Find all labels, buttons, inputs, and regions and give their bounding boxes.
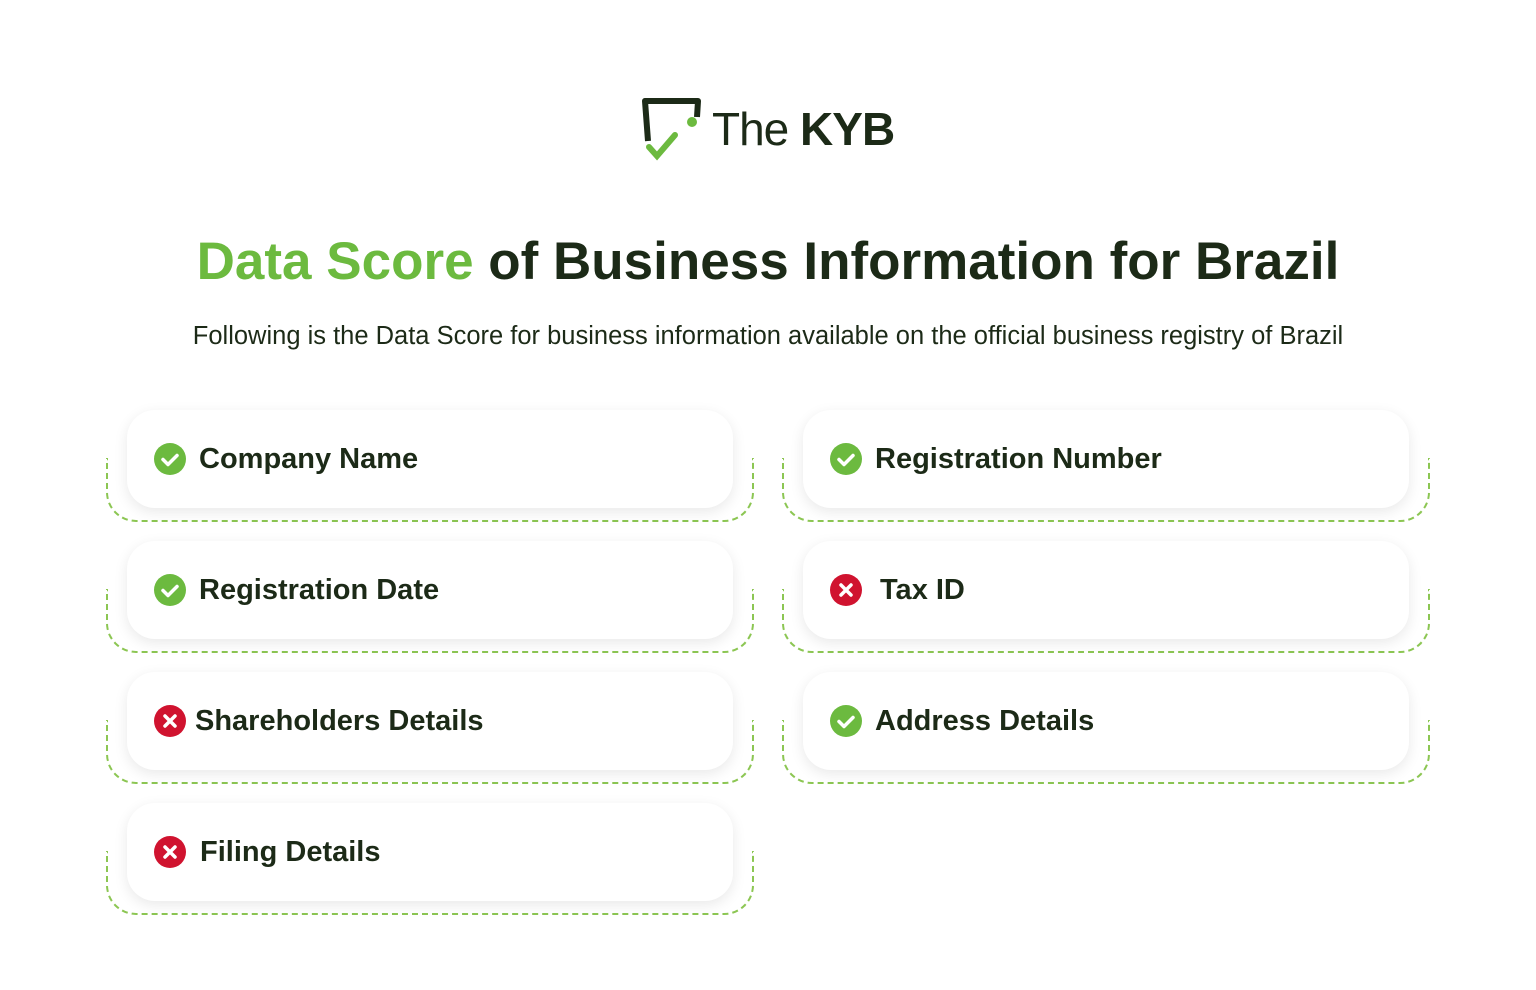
card: Registration Date bbox=[127, 541, 733, 639]
card: Registration Number: Registration Number bbox=[875, 442, 1162, 474]
card: Address Details bbox=[803, 672, 1409, 770]
card: Shareholders Details bbox=[127, 672, 733, 770]
card: Tax ID bbox=[803, 541, 1409, 639]
title: Data Score of Business Information for Brazil bbox=[197, 232, 1339, 291]
text: logo wordmark: The KYB bbox=[712, 103, 894, 155]
card: Registration Date: Registration Date bbox=[199, 574, 439, 606]
card: Company Name bbox=[127, 410, 733, 508]
icon: logo mark bbox=[642, 98, 701, 160]
subtitle: Following is the Data Score for business information available on the official business registry of Brazil bbox=[193, 322, 1343, 350]
card: Filing Details: Filing Details bbox=[200, 836, 380, 868]
card: Address Details: Address Details bbox=[875, 704, 1094, 736]
card: Filing Details bbox=[127, 803, 733, 901]
logo bbox=[642, 98, 894, 160]
card: Registration Number bbox=[803, 410, 1409, 508]
card: Tax ID: Tax ID bbox=[880, 574, 965, 606]
card: Shareholders Details: Shareholders Details bbox=[195, 704, 484, 736]
card: Company Name: Company Name bbox=[199, 442, 418, 474]
